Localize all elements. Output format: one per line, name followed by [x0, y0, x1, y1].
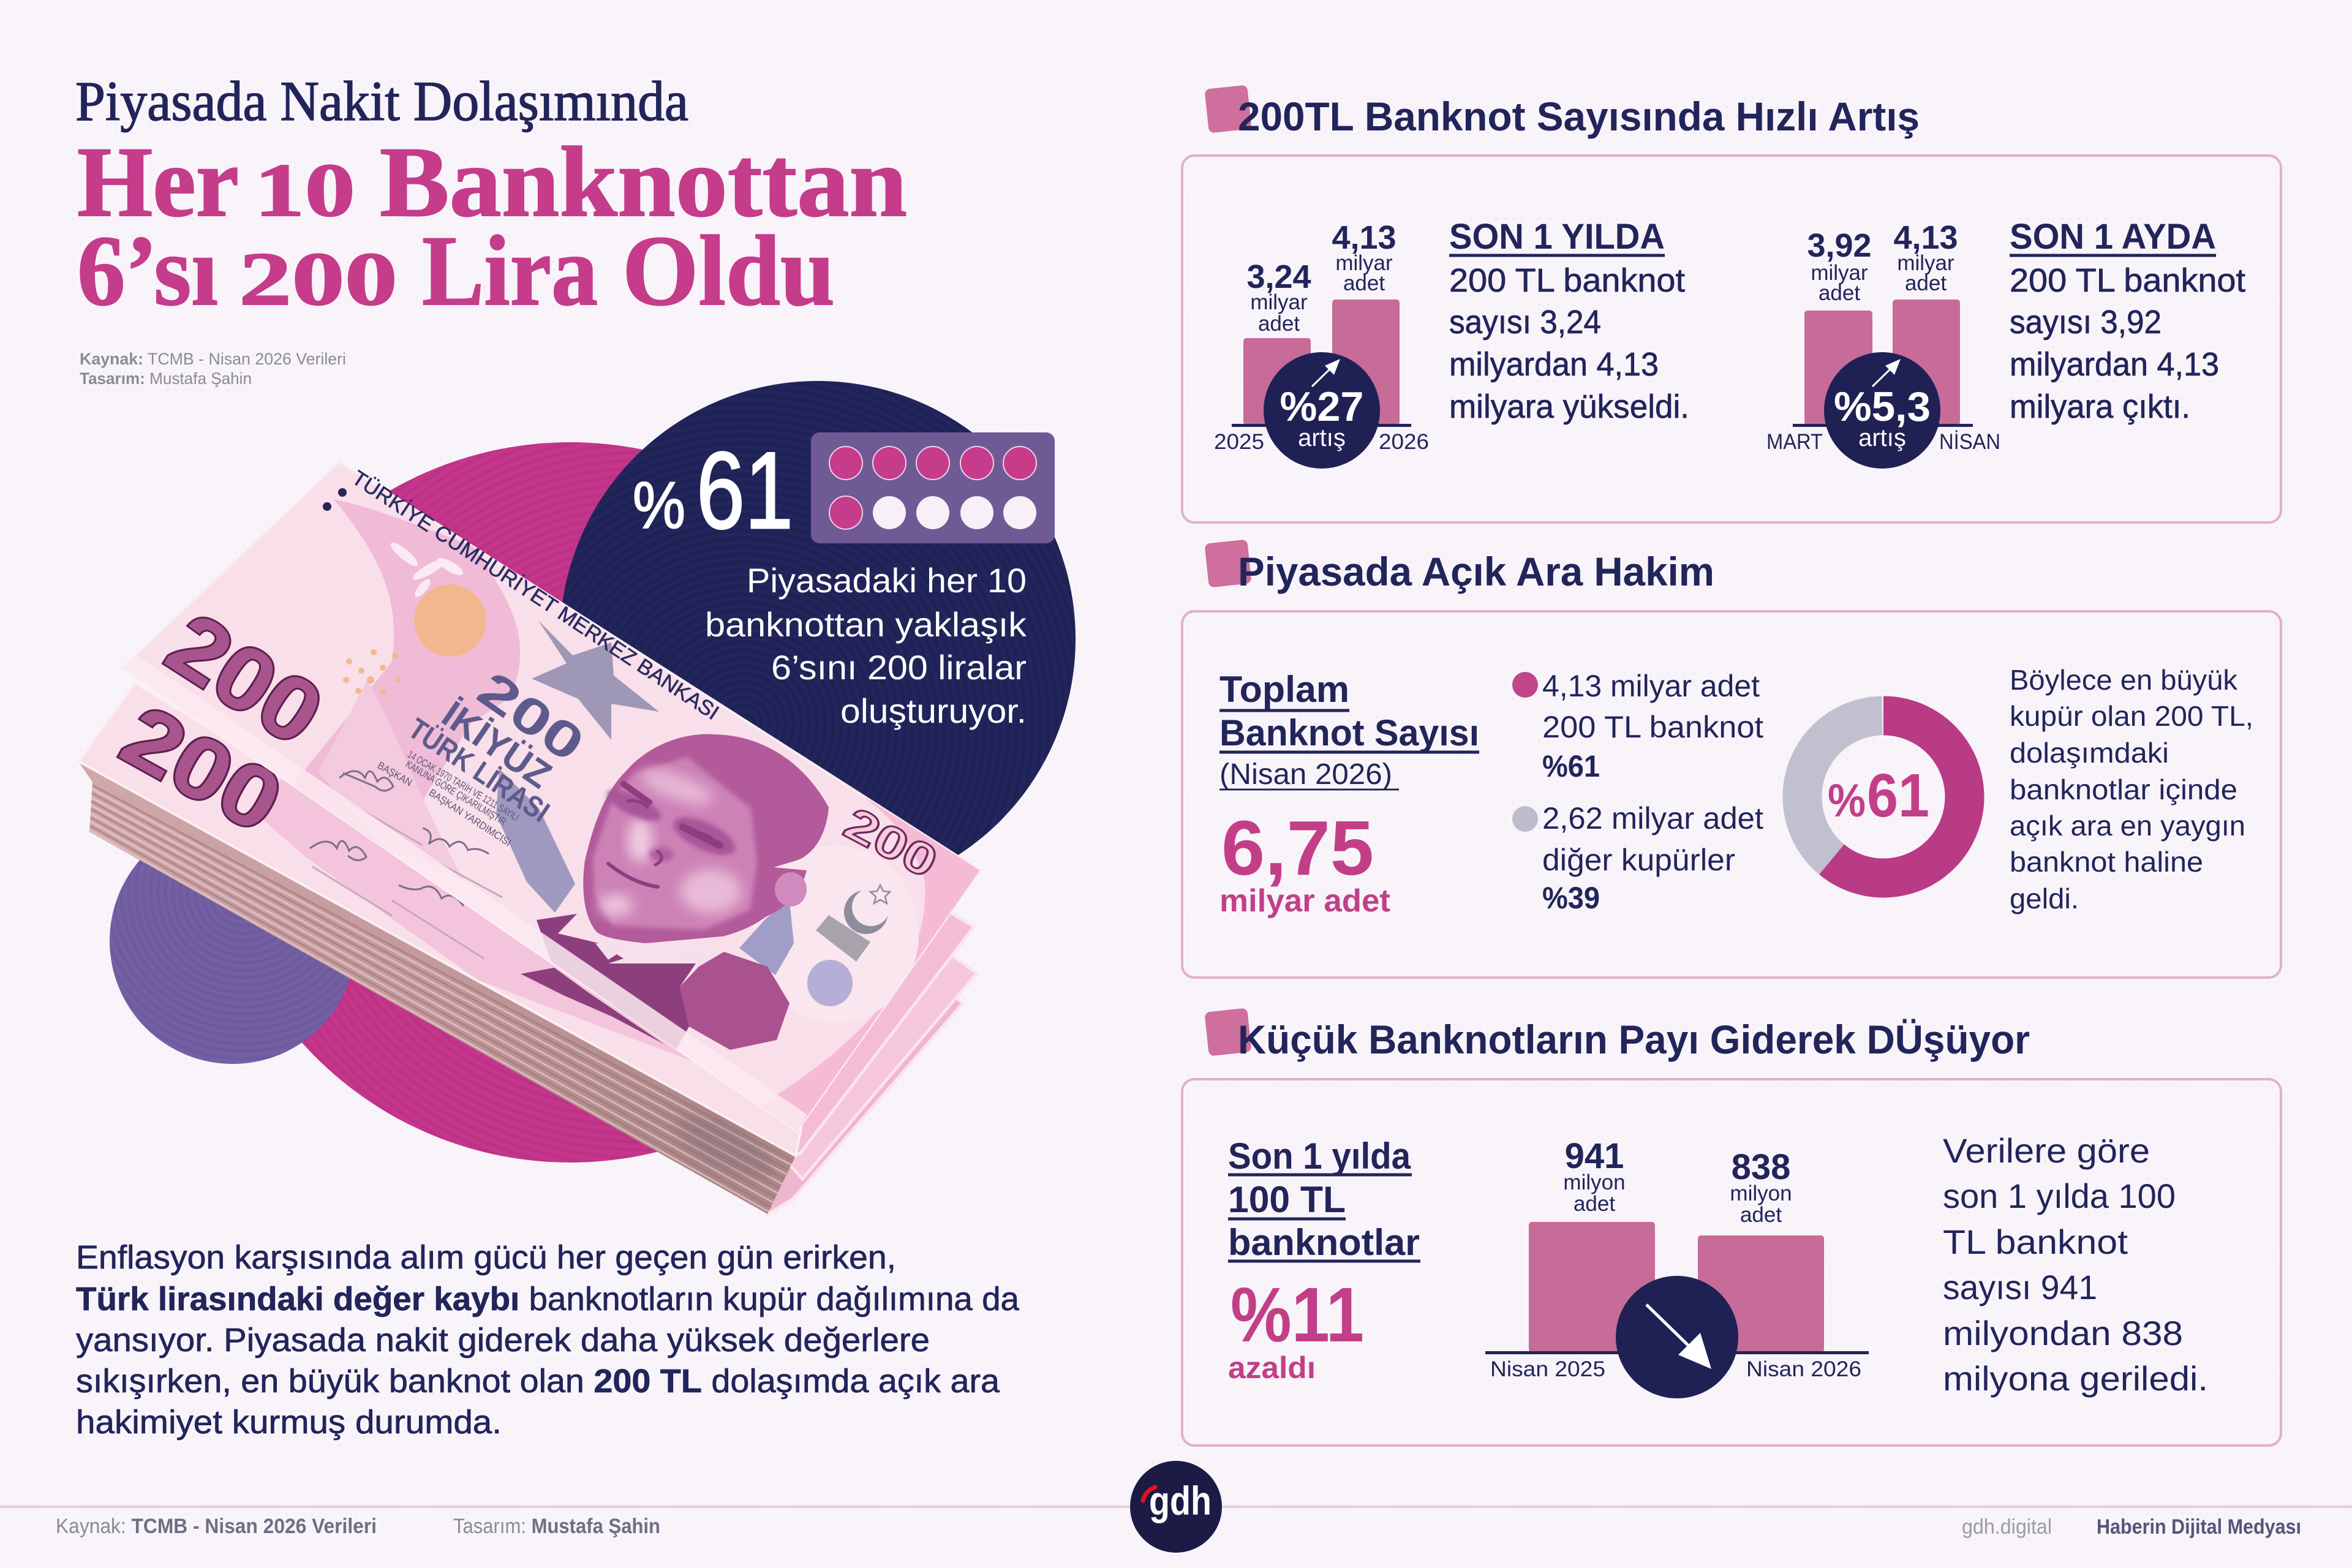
callout text: oluşturuyor. — [840, 692, 1027, 730]
banknote stack illustration — [78, 461, 980, 1214]
footer: site: gdh.digital — [1962, 1515, 2052, 1539]
purple background circle — [110, 818, 356, 1064]
title: main line one: Her — [77, 127, 239, 238]
legend: other denominations: 2,62 milyar adet — [1542, 801, 1763, 835]
100 TL heading: banknotlar — [1228, 1222, 1420, 1263]
bar chart: yearly: 4,13 — [1332, 219, 1396, 256]
title: main line two: 200 — [239, 237, 398, 321]
intro paragraph: Türk lirasındaki değer kaybı banknotların kupür dağılımına da — [76, 1281, 1020, 1317]
callout text — [705, 561, 1027, 730]
intro paragraph — [76, 1239, 1020, 1441]
text: last month: 200 TL banknot — [2010, 262, 2245, 299]
footer: designer: Tasarım: Mustafa Şahin — [453, 1515, 660, 1538]
text: last month: milyara çıktı. — [2010, 388, 2190, 425]
note: denomination words — [402, 661, 594, 829]
note orange dots — [343, 649, 401, 695]
text: dominance note — [2010, 664, 2253, 914]
title: main line one — [77, 127, 907, 238]
note hologram strip — [816, 915, 870, 962]
ten-dot pictogram — [811, 432, 1055, 543]
note pink lens tint — [288, 499, 520, 858]
portrait: coat and lapel — [537, 914, 696, 1054]
portrait: head — [583, 734, 829, 943]
intro paragraph: Enflasyon karşısında alım gücü her geçen gün erirken, — [76, 1239, 896, 1276]
bar chart: monthly: 3,92 — [1807, 227, 1872, 264]
badge: monthly increase: artış — [1858, 424, 1906, 451]
legend: other denominations — [1512, 801, 1763, 915]
legend: other denominations: %39 — [1542, 881, 1600, 915]
bar chart: yearly: 3,24 — [1246, 258, 1311, 295]
bar chart: 100 TL notes: 941 — [1565, 1136, 1624, 1176]
footer — [0, 1461, 2352, 1553]
text: dominance note: Böylece en büyük — [2010, 664, 2238, 696]
note: denomination words: 200 — [468, 661, 594, 773]
note: bank name: TÜRKİYE CUMHURİYET MERKEZ BANKASI — [348, 466, 723, 725]
note rosette — [680, 952, 790, 1050]
bar chart: monthly: milyar — [1811, 261, 1868, 285]
bar chart: 100 TL notes: milyon — [1563, 1170, 1626, 1194]
bar chart: yearly: adet — [1258, 312, 1300, 336]
text: last year: SON 1 YILDA — [1449, 217, 1665, 257]
note dots — [338, 488, 347, 497]
callout text: banknottan yaklaşık — [705, 605, 1027, 644]
note gray-blue ribbon — [496, 769, 575, 913]
note star — [532, 620, 659, 740]
decline value: azaldı — [1228, 1351, 1316, 1385]
portrait: collar — [595, 943, 736, 963]
note legal text: KANUNA GÖRE ÇIKARILMIŞTIR — [404, 758, 508, 827]
text: last year: 200 TL banknot — [1449, 262, 1685, 299]
legend: 200 TL share — [1512, 669, 1763, 783]
text: decline note: TL banknot — [1943, 1223, 2128, 1261]
second note: signatures — [310, 841, 484, 959]
footer: source: Kaynak: TCMB - Nisan 2026 Verileri — [56, 1515, 377, 1538]
note signatures — [339, 771, 502, 897]
decline value: %11 — [1231, 1272, 1364, 1358]
bar chart: monthly: milyar — [1897, 251, 1954, 275]
magenta background circle — [210, 442, 930, 1163]
note: denomination words: TÜRK LİRASI — [402, 712, 555, 829]
bar chart: yearly: 2025 — [1214, 430, 1264, 454]
text: last year: milyara yükseldi. — [1449, 388, 1689, 425]
bar chart: 100 TL notes: 838 — [1732, 1147, 1790, 1187]
bar chart: 100 TL notes: adet — [1574, 1192, 1615, 1216]
section heading: 200 TL growth: 200TL Banknot Sayısında Hızlı Artış — [1238, 94, 1920, 139]
note gray-blue leaf — [739, 900, 794, 975]
text: decline note: sayısı 941 — [1943, 1268, 2097, 1306]
title: main line one: Banknottan — [380, 127, 907, 238]
source and designer credit: Kaynak: TCMB - Nisan 2026 Verileri — [80, 350, 346, 368]
text: decline note: son 1 yılda 100 — [1943, 1177, 2176, 1215]
bar chart: 100 TL notes: milyon — [1730, 1182, 1792, 1205]
text: dominance note: kupür olan 200 TL, — [2010, 700, 2253, 732]
badge: monthly increase — [1824, 352, 1940, 469]
source and designer credit — [80, 350, 346, 388]
text: last year: milyardan 4,13 — [1449, 346, 1659, 383]
text: decline note: milyona geriledi. — [1943, 1359, 2208, 1398]
text: dominance note: açık ara en yaygın — [2010, 810, 2245, 842]
navy background circle — [560, 381, 1076, 897]
text: decline note: Verilere göre — [1943, 1131, 2150, 1170]
note legal text: BAŞKAN — [375, 760, 414, 788]
panel: 200 TL growth — [1182, 156, 2281, 522]
note right pink strip — [760, 782, 980, 1131]
total banknotes heading: Toplam — [1219, 669, 1349, 710]
badge: yearly increase: %27 — [1280, 383, 1363, 430]
donut chart: 61 — [1867, 761, 1929, 830]
portrait: eyes, brows, mouth, ear — [608, 784, 807, 907]
stack: right side layers — [735, 858, 977, 1214]
note legal text — [375, 748, 521, 848]
section heading: small notes decline: Küçük Banknotların Payı Giderek DÜşüyor — [1238, 1017, 2030, 1062]
title: main line one: 10 — [254, 148, 355, 232]
legend: 200 TL share: %61 — [1542, 749, 1600, 783]
badge: downward arrow — [1616, 1276, 1738, 1398]
total banknotes heading: Banknot Sayısı — [1219, 712, 1479, 753]
text: dominance note: banknotlar içinde — [2010, 774, 2237, 805]
text: dominance note: banknot haline — [2010, 846, 2203, 878]
note: denomination words: İKİYÜZ — [434, 693, 559, 797]
bar chart: 100 TL notes — [1485, 1136, 1869, 1381]
total banknotes value: 6,75 — [1221, 805, 1374, 891]
text: last month: milyardan 4,13 — [2010, 346, 2219, 383]
text: dominance note: dolaşımdaki — [2010, 737, 2169, 769]
bar chart: monthly — [1766, 219, 2000, 454]
title block — [75, 70, 907, 326]
second note: denomination: 200 — [107, 687, 297, 851]
top banknote face — [122, 461, 980, 1131]
bar chart: yearly: 2026 — [1379, 430, 1429, 454]
bar chart: 100 TL notes: Nisan 2026 — [1746, 1357, 1861, 1381]
title: main line two: Lira — [422, 216, 598, 326]
callout text: Piyasadaki her 10 — [747, 561, 1027, 600]
footer: slogan: Haberin Dijital Medyası — [2097, 1515, 2301, 1539]
title: kicker: Piyasada Nakit Dolaşımında — [75, 70, 688, 132]
text: last month — [2010, 217, 2245, 425]
bar chart: yearly: milyar — [1250, 290, 1308, 314]
note crescent and star emblem — [844, 885, 890, 934]
total banknotes heading — [1219, 669, 1479, 791]
100 TL heading — [1228, 1136, 1420, 1263]
bar chart: monthly: NİSAN — [1939, 430, 2000, 454]
text: last month: SON 1 AYDA — [2010, 217, 2216, 257]
note white flower marks — [391, 543, 463, 597]
big percent figure: % — [633, 468, 685, 542]
callout text: 6’sını 200 liralar — [771, 648, 1027, 687]
bar chart: yearly — [1214, 219, 1429, 454]
bar chart: monthly: adet — [1905, 271, 1947, 295]
text: last year — [1449, 217, 1689, 425]
source and designer credit: Tasarım: Mustafa Şahin — [80, 369, 252, 388]
total banknotes value — [1219, 805, 1390, 919]
logo: gdh — [1130, 1461, 1222, 1553]
note legal text: BAŞKAN YARDIMCISI — [427, 786, 513, 848]
text: decline note — [1943, 1131, 2208, 1398]
intro paragraph: yansıyor. Piyasada nakit giderek daha yüksek değerlere — [76, 1322, 930, 1359]
bar chart: monthly: 4,13 — [1893, 219, 1958, 256]
intro paragraph: sıkışırken, en büyük banknot olan 200 TL dolaşımda açık ara — [76, 1363, 1000, 1400]
bar chart: yearly: adet — [1343, 271, 1385, 295]
intro paragraph: hakimiyet kurmuş durumda. — [76, 1404, 502, 1441]
badge: yearly increase: artış — [1298, 424, 1346, 451]
note: big denomination: 200 — [151, 594, 340, 764]
total banknotes heading: (Nisan 2026) — [1219, 758, 1392, 791]
legend: 200 TL share: 4,13 milyar adet — [1542, 669, 1760, 703]
note legal text: 14 OCAK 1970 TARİH VE 1211 SAYILI — [405, 748, 521, 823]
note lower edge band — [122, 654, 807, 1131]
text: last year: sayısı 3,24 — [1449, 304, 1601, 341]
100 TL heading: 100 TL — [1228, 1179, 1346, 1220]
panel: small notes decline — [1182, 1079, 2281, 1446]
bar chart: 100 TL notes: Nisan 2025 — [1490, 1357, 1605, 1381]
donut chart: % — [1828, 775, 1866, 827]
badge: yearly increase — [1264, 352, 1380, 469]
note pale window — [876, 936, 919, 1012]
note orange rosette — [414, 584, 486, 657]
section heading: market dominance: Piyasada Açık Ara Hakim — [1238, 549, 1714, 594]
portrait: face tones — [593, 757, 757, 930]
note: small denomination: 200 — [836, 797, 946, 888]
bar chart: monthly: MART — [1766, 430, 1823, 454]
second banknote — [78, 683, 809, 1156]
big number: 61 — [696, 429, 793, 551]
stat callout: %61 — [633, 429, 1055, 730]
bar chart: monthly: adet — [1819, 281, 1860, 305]
text: last month: sayısı 3,92 — [2010, 304, 2162, 341]
donut chart — [1802, 715, 1964, 878]
bar chart: yearly: milyar — [1335, 251, 1393, 275]
legend: 200 TL share: 200 TL banknot — [1542, 710, 1763, 744]
title: main line two — [77, 216, 835, 326]
title: main line two: Oldu — [622, 216, 835, 326]
panel: market dominance — [1182, 611, 2281, 978]
title: main line two: 6’sı — [77, 216, 218, 326]
stack: paper edge block — [78, 761, 796, 1214]
logo: gdh: gdh — [1149, 1478, 1212, 1523]
bar chart: 100 TL notes: adet — [1740, 1203, 1782, 1227]
total banknotes value: milyar adet — [1219, 883, 1390, 919]
decline value — [1228, 1272, 1364, 1385]
badge: monthly increase: %5,3 — [1834, 383, 1931, 430]
text: decline note: milyondan 838 — [1943, 1314, 2183, 1352]
text: dominance note: geldi. — [2010, 883, 2079, 914]
100 TL heading: Son 1 yılda — [1228, 1136, 1411, 1177]
legend: other denominations: diğer kupürler — [1542, 843, 1735, 877]
